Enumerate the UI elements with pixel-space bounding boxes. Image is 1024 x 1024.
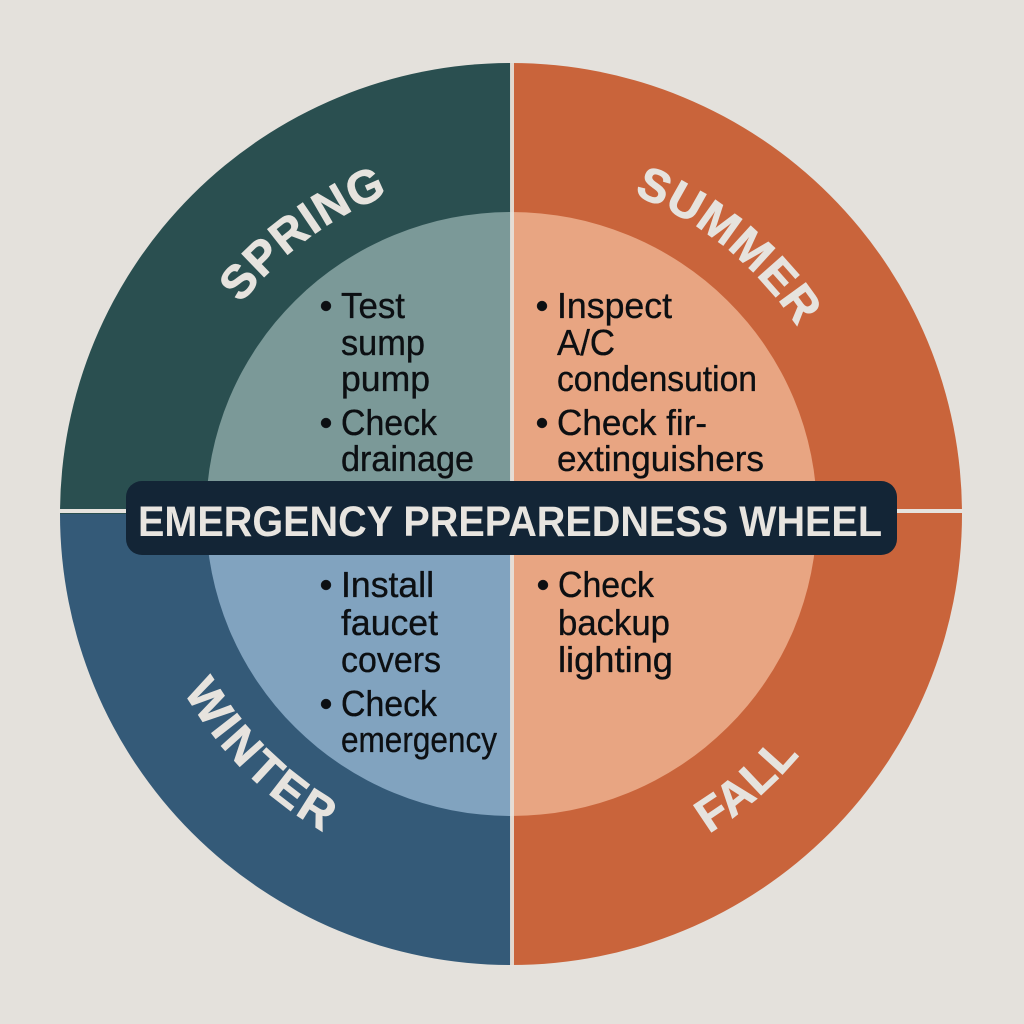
checklist: spring (321, 285, 474, 479)
wheel (59, 62, 963, 966)
title: EMERGENCY PREPAREDNESS WHEEL (138, 498, 882, 546)
checklist: summer: extinguishers (557, 438, 764, 479)
panel: fall inner (511, 514, 817, 816)
checklist: winter: Install (341, 564, 434, 605)
panel: winter outer (60, 514, 511, 965)
checklist: spring: Test (341, 285, 405, 326)
checklist: fall: backup (558, 602, 670, 643)
panel: spring outer (60, 63, 511, 514)
checklist: winter: Check (341, 683, 438, 724)
panel: summer outer (511, 63, 962, 514)
checklist: summer: condensution (557, 358, 757, 399)
checklist: fall: Check (558, 564, 655, 605)
checklist: spring: drainage (341, 438, 474, 479)
panel: winter inner (206, 514, 511, 816)
checklist: winter: covers (341, 639, 441, 680)
checklist: fall: lighting (558, 639, 673, 680)
checklist: winter: faucet (341, 602, 438, 643)
checklist: summer: Check fir- (557, 402, 707, 443)
season label: winter: WINTER (187, 673, 335, 832)
checklist: summer (537, 285, 764, 479)
checklist: summer: Inspect (557, 285, 672, 326)
banner background (126, 481, 897, 555)
checklist: fall (538, 564, 673, 680)
checklist: winter: emergency (341, 719, 497, 760)
panel: summer inner (511, 212, 817, 514)
checklist: spring: sump (341, 322, 425, 363)
season label: spring: SPRING (221, 169, 384, 299)
checklist: spring: Check (341, 402, 438, 443)
season label: summer: SUMMER (638, 168, 819, 327)
checklist: spring: pump (341, 358, 430, 399)
checklist: winter (321, 564, 497, 760)
panel: fall outer (511, 514, 962, 965)
horizontal divider (59, 509, 963, 513)
panel: spring inner (206, 212, 511, 514)
title banner (126, 481, 897, 555)
vertical divider (510, 62, 514, 966)
checklist: summer: A/C (557, 322, 615, 363)
season label: fall: FALL (693, 747, 800, 833)
